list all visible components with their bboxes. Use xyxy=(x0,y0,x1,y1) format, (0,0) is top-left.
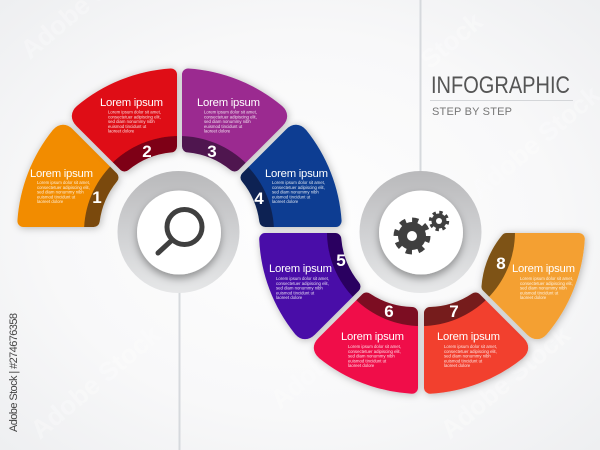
segment 3 body: euismod tincidunt ut xyxy=(204,124,243,129)
watermark text: Stock xyxy=(415,6,489,75)
segment 5 body: consectetuer adipiscing elit, xyxy=(276,281,329,286)
segment 8 body: sed diam nonummy nibh xyxy=(520,286,567,291)
segment 1 body: Lorem ipsum dolor sit amet, xyxy=(37,180,90,185)
segment 4 number: 4 xyxy=(254,189,264,208)
segment 1 body: laoreet dolore xyxy=(37,199,64,204)
segment 2 body: euismod tincidunt ut xyxy=(108,124,147,129)
left circle hub xyxy=(118,171,240,293)
segment 3 body: sed diam nonummy nibh xyxy=(204,119,251,124)
segment 8 body: laoreet dolore xyxy=(520,295,547,300)
segment 6 heading: Lorem ipsum xyxy=(341,331,404,343)
segment 8 xyxy=(478,230,590,344)
icon: gears xyxy=(396,212,448,252)
segment 8 number: 8 xyxy=(496,254,506,273)
segment 4 heading: Lorem ipsum xyxy=(265,168,328,180)
subtitle: STEP BY STEP xyxy=(432,106,512,118)
segment 6 body: sed diam nonummy nibh xyxy=(348,354,395,359)
segment 7 body: sed diam nonummy nibh xyxy=(444,354,491,359)
vertical line top right xyxy=(420,0,422,172)
segment 6 body: consectetuer adipiscing elit, xyxy=(348,349,401,354)
stock credit: Adobe Stock | #274676358 xyxy=(8,313,20,432)
segment 7 heading: Lorem ipsum xyxy=(437,331,500,343)
segment 2 body: consectetuer adipiscing elit, xyxy=(108,114,161,119)
segment 7 number: 7 xyxy=(449,302,459,321)
segment 7 xyxy=(421,290,533,399)
segment 5 body: laoreet dolore xyxy=(276,295,303,300)
segment 2 body: Lorem ipsum dolor sit amet, xyxy=(108,110,161,114)
title: INFOGRAPHIC xyxy=(431,72,570,99)
segment 6 body: laoreet dolore xyxy=(348,363,375,368)
segment 2 number: 2 xyxy=(142,142,152,161)
segment 1 body: euismod tincidunt ut xyxy=(37,194,76,199)
segment 6 body: euismod tincidunt ut xyxy=(348,358,387,363)
segment 5 body: sed diam nonummy nibh xyxy=(276,286,323,291)
segment 7 body: consectetuer adipiscing elit, xyxy=(444,349,497,354)
segment 5 body: Lorem ipsum dolor sit amet, xyxy=(276,276,329,281)
segment 4 body: Lorem ipsum dolor sit amet, xyxy=(272,180,325,185)
segment 2 body: laoreet dolore xyxy=(108,129,135,134)
segment 4 body: consectetuer adipiscing elit, xyxy=(272,185,325,190)
segment 7 body: Lorem ipsum dolor sit amet, xyxy=(444,344,497,349)
segment 3 heading: Lorem ipsum xyxy=(197,97,260,109)
segment 8 body: euismod tincidunt ut xyxy=(520,290,559,295)
segment 3 body: consectetuer adipiscing elit, xyxy=(204,114,257,119)
segment 8 body: Lorem ipsum dolor sit amet, xyxy=(520,276,573,281)
segment 5 heading: Lorem ipsum xyxy=(269,263,332,275)
segment 3 number: 3 xyxy=(207,142,217,161)
segment 2 heading: Lorem ipsum xyxy=(100,97,163,109)
segment 8 body: consectetuer adipiscing elit, xyxy=(520,281,573,286)
vertical line bottom left xyxy=(178,292,180,450)
title underline xyxy=(430,100,573,101)
segment 4 body: euismod tincidunt ut xyxy=(272,194,311,199)
segment 6 body: Lorem ipsum dolor sit amet, xyxy=(348,344,401,349)
segment 1 body: sed diam nonummy nibh xyxy=(37,190,84,195)
segment 7 body: euismod tincidunt ut xyxy=(444,358,483,363)
segment 1 number: 1 xyxy=(92,188,102,207)
segment 2 body: sed diam nonummy nibh xyxy=(108,119,155,124)
segment 4 body: laoreet dolore xyxy=(272,199,299,204)
segment 1 heading: Lorem ipsum xyxy=(30,168,93,180)
segment 1 body: consectetuer adipiscing elit, xyxy=(37,185,90,190)
segment 2 xyxy=(69,66,182,176)
segment 5 number: 5 xyxy=(336,251,346,270)
right circle hub xyxy=(360,171,482,293)
segment 6 xyxy=(311,290,424,399)
segment 5 body: euismod tincidunt ut xyxy=(276,290,315,295)
segment 1 xyxy=(14,122,123,232)
segment 7 body: laoreet dolore xyxy=(444,363,471,368)
segment 4 body: sed diam nonummy nibh xyxy=(272,190,319,195)
watermark text: Adobe Stock xyxy=(25,319,166,445)
segment 3 body: Lorem ipsum dolor sit amet, xyxy=(204,110,257,114)
segment 6 number: 6 xyxy=(384,302,394,321)
segment 8 heading: Lorem ipsum xyxy=(512,263,575,275)
segment 3 xyxy=(179,66,292,176)
segment 4 xyxy=(238,122,346,232)
segment 5 xyxy=(256,230,365,344)
segment 3 body: laoreet dolore xyxy=(204,129,231,134)
watermark text: Adobe Stock xyxy=(265,289,406,415)
watermark text: Adobe Stock xyxy=(435,319,576,445)
icon: magnifying glass xyxy=(158,210,202,253)
